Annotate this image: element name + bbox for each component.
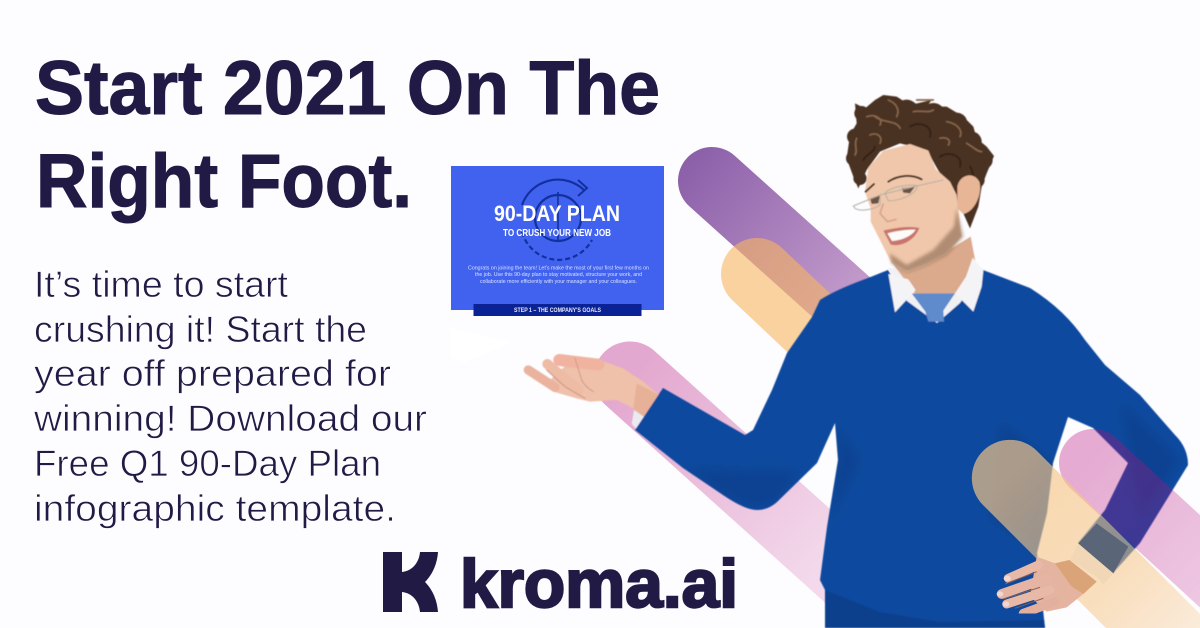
body text: year off prepared for — [34, 353, 391, 394]
ear — [957, 175, 980, 214]
card background — [451, 166, 664, 310]
card paragraph — [468, 266, 649, 285]
logo mark — [383, 552, 438, 612]
neck — [890, 237, 976, 293]
card paragraph: Congrats on joining the team! Let’s make the most of your first few months on — [468, 266, 649, 272]
right hand and cuff — [997, 523, 1128, 613]
fingernails — [997, 576, 1011, 607]
icon: circular arrow target — [522, 180, 592, 260]
finger gaps — [1003, 572, 1043, 608]
glasses — [853, 180, 943, 210]
overlay stripe: pink — [1059, 429, 1200, 608]
title — [35, 46, 660, 224]
person — [528, 95, 1188, 628]
stubble — [890, 208, 963, 272]
title: Start 2021 On The — [35, 46, 660, 131]
left hand — [528, 358, 665, 430]
fingers — [1002, 565, 1055, 613]
shirt behind neck — [888, 268, 983, 323]
stripe: purple — [712, 181, 900, 350]
card title: 90-DAY PLAN — [494, 201, 620, 226]
faint reflection under card — [450, 328, 512, 362]
stripe: pink — [630, 378, 860, 585]
collar right — [955, 258, 983, 312]
card paragraph: the job. Use this 90-day plan to stay motivated, structure your work, and — [475, 272, 642, 278]
sleeve under overlay — [1078, 523, 1128, 573]
title: Right Foot. — [36, 139, 412, 224]
card subtitle: TO CRUSH YOUR NEW JOB — [503, 228, 611, 239]
hair dark curls — [863, 124, 973, 190]
sweater shading — [683, 400, 1180, 628]
nose shadow — [880, 203, 897, 222]
smile — [883, 227, 919, 245]
overlay stripe: orange — [972, 440, 1200, 628]
face — [865, 144, 962, 272]
card step bar — [474, 304, 642, 316]
shirt collar and tie — [888, 258, 983, 322]
collar left — [888, 274, 916, 312]
head — [846, 95, 994, 272]
eyebrows — [866, 176, 922, 192]
body text: winning! Download our — [33, 398, 427, 439]
card paragraph: collaborate more efficiently with your manager and your colleagues. — [480, 279, 637, 285]
cuff — [1070, 544, 1113, 584]
logo: kroma.ai — [383, 546, 738, 622]
body text: Free Q1 90-Day Plan — [34, 443, 381, 484]
tie — [912, 293, 955, 322]
body text: crushing it! Start the — [34, 309, 367, 350]
sweater — [635, 270, 1188, 628]
hair highlights — [855, 100, 982, 155]
decorative stripes over person — [972, 429, 1200, 628]
hair — [846, 95, 994, 228]
logo wordmark: kroma.ai — [460, 546, 738, 622]
stripe: orange — [757, 274, 880, 390]
eyes — [870, 187, 915, 204]
decorative stripes behind person — [630, 181, 900, 585]
body text: infographic template. — [34, 488, 396, 529]
step bar label: STEP 1 – THE COMPANY'S GOALS — [514, 308, 601, 314]
wrist — [1055, 560, 1097, 594]
body text — [33, 264, 427, 529]
product card: 90-day plan — [450, 166, 664, 362]
body text: It’s time to start — [34, 264, 289, 305]
palm — [1030, 557, 1097, 612]
